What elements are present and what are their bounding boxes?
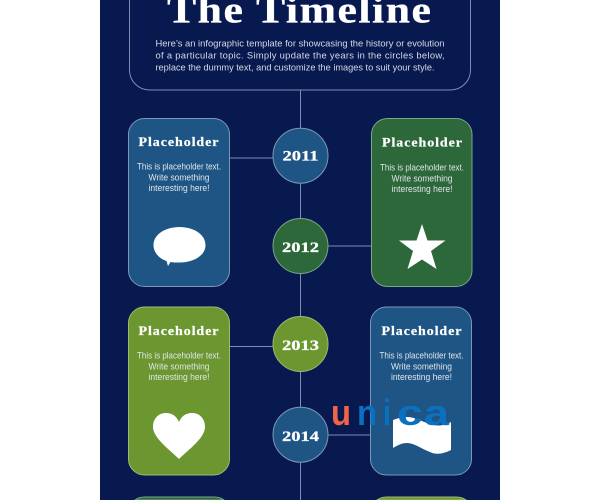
- intro text: replace the dummy text, and customize the images to suit your style.: [156, 62, 434, 72]
- header panel: [130, 0, 470, 90]
- card: 2014: Placeholder: [382, 324, 462, 338]
- card: 2012: Write something: [392, 174, 452, 184]
- watermark logo: unica: n: [357, 392, 377, 433]
- year circle: 2011: 2011: [282, 148, 318, 164]
- card: 2013: Placeholder: [139, 324, 219, 338]
- icon: heart: [153, 413, 205, 459]
- card: 2013: This is placeholder text.: [137, 350, 221, 360]
- card: 2014: [370, 307, 472, 475]
- year circle: 2014: [273, 407, 328, 462]
- card: 2012: interesting here!: [392, 184, 452, 194]
- year circle: 2012: 2012: [282, 240, 319, 256]
- watermark logo: unica: [331, 392, 450, 433]
- card: 2011: Write something: [148, 172, 210, 182]
- watermark logo: unica: c: [397, 392, 423, 433]
- watermark logo: unica: u: [331, 392, 351, 433]
- icon: speech bubble: [154, 227, 206, 266]
- intro text: [156, 38, 444, 72]
- card: 2014: This is placeholder text.: [380, 350, 464, 360]
- intro text: Here’s an infographic template for showcasing the history or evolution: [156, 38, 444, 48]
- watermark logo: unica: i: [383, 392, 391, 433]
- card: 2011: Placeholder: [139, 135, 219, 149]
- year circle: 2014: 2014: [282, 429, 319, 445]
- year circle: 2011: [273, 128, 328, 183]
- intro text: of a particular topic. Simply update the years in the circles below,: [156, 50, 444, 60]
- card: 2011: [128, 118, 230, 286]
- card: 2014: Write something: [391, 362, 452, 372]
- icon: flag: [393, 417, 451, 454]
- year circle: 2013: 2013: [282, 338, 319, 354]
- card: 2012: Placeholder: [382, 135, 462, 149]
- year circle: 2012: [273, 218, 328, 274]
- watermark logo: unica: a: [424, 392, 450, 433]
- card: 2011: interesting here!: [148, 183, 210, 193]
- card: 2013: [128, 307, 230, 475]
- card: 2011: This is placeholder text.: [137, 162, 221, 172]
- card: 2014: interesting here!: [391, 372, 452, 382]
- card: 2012: [372, 118, 472, 286]
- bottom card: right: [377, 497, 466, 500]
- icon: star: [399, 224, 446, 269]
- card: 2013: interesting here!: [148, 372, 210, 382]
- card: 2013: Write something: [148, 362, 210, 372]
- year circle: 2013: [273, 316, 328, 372]
- card: 2012: This is placeholder text.: [380, 162, 464, 172]
- bottom card: left: [135, 497, 224, 500]
